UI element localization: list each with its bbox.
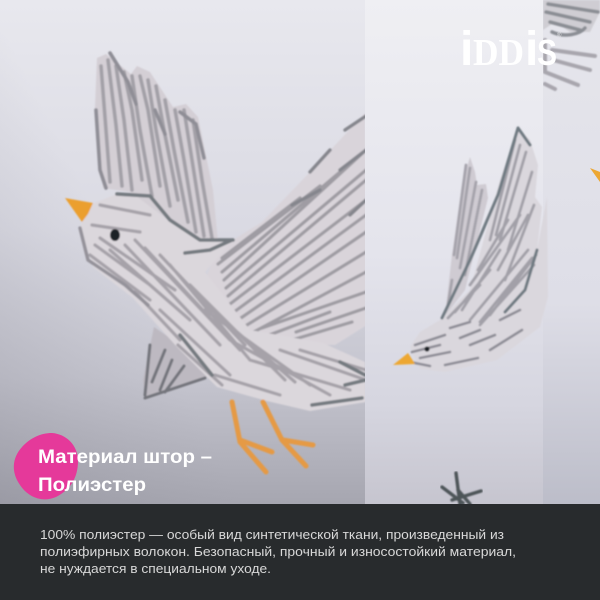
small bird eye <box>424 346 430 352</box>
illustration: small bird <box>393 128 548 372</box>
bird eye <box>110 229 120 241</box>
small bird feathers <box>448 140 536 325</box>
logo <box>460 23 562 76</box>
small bird dark wing edge <box>442 128 537 318</box>
illustration: large bird <box>65 53 367 472</box>
illustration: top right wing fragment <box>543 0 600 89</box>
dark description band <box>0 504 600 600</box>
illustration: orange beak at right edge <box>590 168 600 182</box>
bird tail <box>143 327 207 399</box>
bird right wing <box>205 113 367 346</box>
heading: Полиэстер <box>38 475 146 496</box>
description text: полиэфирных волокон. Безопасный, прочный и износостойкий материал, <box>40 544 516 559</box>
heading <box>38 447 212 496</box>
logo: i <box>460 23 473 76</box>
logo: DD <box>473 32 524 74</box>
description text: 100% полиэстер — особый вид синтетической ткани, произведенный из <box>40 527 504 542</box>
description text: не нуждается в специальном уходе. <box>40 561 271 576</box>
logo: S <box>537 32 557 73</box>
small bird beak <box>393 353 415 365</box>
description text <box>40 527 516 576</box>
heading: Материал штор – <box>38 447 212 468</box>
small bird body <box>410 128 548 372</box>
logo: ® <box>557 32 562 39</box>
illustration: star shape <box>442 473 481 504</box>
logo: i <box>525 23 538 76</box>
small bird breast marks <box>410 310 522 366</box>
pink blob accent <box>14 433 78 499</box>
bird beak <box>65 198 93 222</box>
small bird rear wing <box>445 157 488 316</box>
bird legs <box>232 402 313 472</box>
bird upper wing <box>95 53 218 242</box>
bird body and head <box>80 194 366 411</box>
